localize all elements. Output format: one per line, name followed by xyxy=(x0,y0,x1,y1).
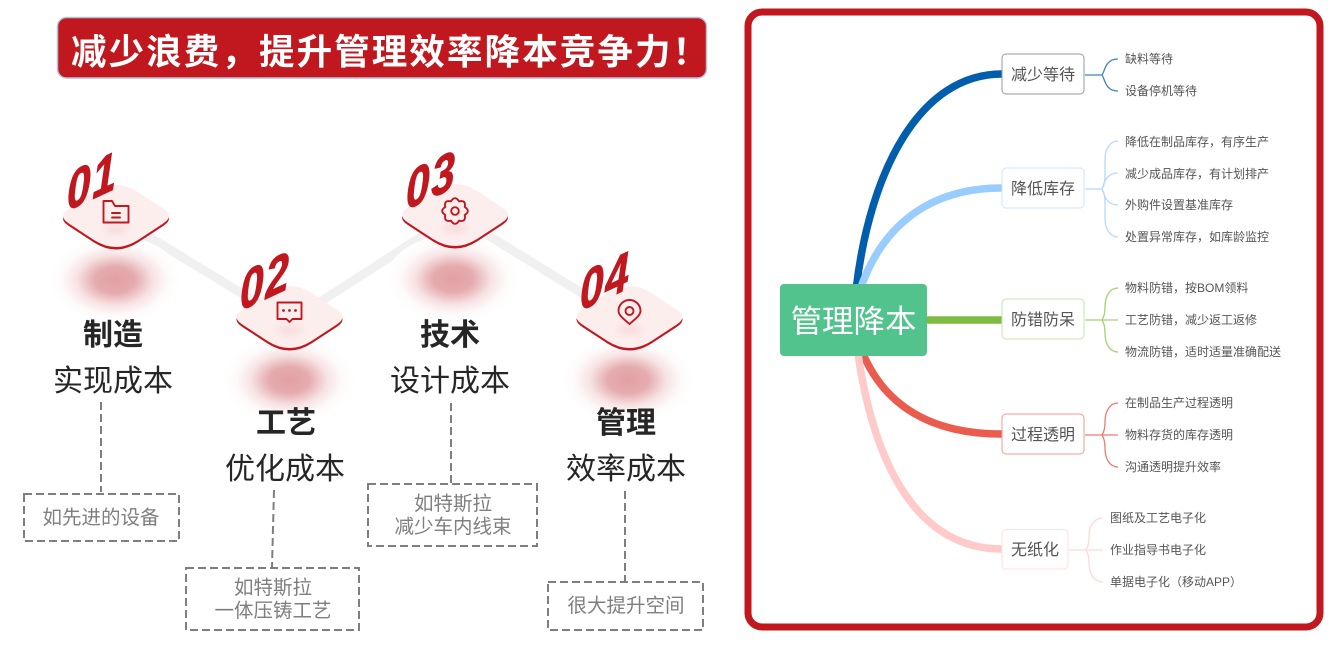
diamond 02 with chat icon xyxy=(236,286,342,350)
node: 过程透明 xyxy=(1002,414,1084,454)
branch curve: 无纸化 xyxy=(858,354,1002,549)
dashed leader 01 xyxy=(100,402,102,492)
heading 工艺: 工艺 xyxy=(256,407,316,440)
branch curve: 降低库存 xyxy=(860,188,1002,290)
node: 降低库存 xyxy=(1002,168,1084,208)
leaves: 过程透明 xyxy=(1125,395,1233,474)
subheading 优化成本: 优化成本 xyxy=(225,453,345,486)
note 01: 如先进的设备 xyxy=(42,507,160,529)
leaves: 无纸化: 作业指导书电子化 xyxy=(1110,542,1206,557)
leaves: 无纸化: 单据电子化（移动APP） xyxy=(1110,575,1242,589)
connector fork: 降低库存 xyxy=(1085,141,1118,237)
dashed leader 03 xyxy=(450,403,452,483)
note 04 xyxy=(548,582,703,630)
note 02: 一体压铸工艺 xyxy=(214,600,332,622)
node: 减少等待: 减少等待 xyxy=(1011,66,1075,84)
note 03: 减少车内线束 xyxy=(394,516,512,538)
node: 无纸化 xyxy=(1002,530,1068,569)
node: 无纸化: 无纸化 xyxy=(1011,541,1059,559)
leaves: 防错防呆: 工艺防错，减少返工返修 xyxy=(1125,312,1257,327)
panel: mind map xyxy=(748,12,1320,627)
leaves: 减少等待: 缺料等待 xyxy=(1125,51,1173,66)
subheading 设计成本: 设计成本 xyxy=(390,365,510,398)
diamond 01 with folder icon xyxy=(63,185,169,250)
number 01: 01 xyxy=(67,138,118,223)
note 02 xyxy=(186,568,359,630)
note 03: 如特斯拉 xyxy=(414,493,492,515)
note 03 xyxy=(368,484,537,546)
leaves: 过程透明: 沟通透明提升效率 xyxy=(1125,459,1221,474)
dashed leader 04 xyxy=(624,491,626,581)
title banner: 减少浪费，提升管理效率降本竞争力！ xyxy=(71,32,710,72)
leaves: 降低库存: 减少成品库存，有计划排产 xyxy=(1125,166,1269,181)
node: 减少等待 xyxy=(1002,54,1084,94)
number 03: 03 xyxy=(406,137,457,222)
shadow blob 04 xyxy=(562,336,694,424)
leaves: 无纸化 xyxy=(1110,511,1242,589)
heading 制造: 制造 xyxy=(83,319,143,352)
leaves: 防错防呆: 物料防错，按BOM领料 xyxy=(1125,280,1248,295)
leaves: 无纸化: 图纸及工艺电子化 xyxy=(1110,511,1206,525)
leaves: 防错防呆 xyxy=(1125,280,1281,359)
note 01 xyxy=(24,494,179,541)
branch line: 防错防呆 xyxy=(925,316,1002,324)
number 04: 04 xyxy=(580,238,631,323)
step 02: process xyxy=(186,238,359,630)
diamond 04 with location pin icon xyxy=(576,286,682,350)
dashed leader 02 xyxy=(272,490,274,567)
heading 技术: 技术 xyxy=(420,319,480,352)
connector fork: 无纸化 xyxy=(1069,518,1103,582)
leaves: 防错防呆: 物流防错，适时适量准确配送 xyxy=(1125,344,1281,359)
connector fork: 过程透明 xyxy=(1085,403,1118,467)
leaves: 降低库存: 处置异常库存，如库龄监控 xyxy=(1125,229,1269,244)
subheading 实现成本: 实现成本 xyxy=(53,365,173,398)
branch curve: 减少等待 xyxy=(856,74,1002,290)
leaves: 降低库存: 降低在制品库存，有序生产 xyxy=(1125,134,1269,149)
node: 降低库存: 降低库存 xyxy=(1011,180,1075,198)
central node: 管理降本 xyxy=(790,303,917,339)
connector fork: 减少等待 xyxy=(1085,59,1118,91)
central node xyxy=(780,284,927,356)
diamond 03 with gear icon xyxy=(402,184,508,248)
number 02: 02 xyxy=(240,238,291,323)
shadow blob 01 xyxy=(49,236,181,324)
leaves: 减少等待: 设备停机等待 xyxy=(1125,83,1197,98)
leaves: 降低库存: 外购件设置基准库存 xyxy=(1125,197,1233,212)
node: 防错防呆 xyxy=(1002,299,1084,339)
subheading 效率成本: 效率成本 xyxy=(566,453,686,486)
connector line xyxy=(116,215,629,322)
node: 防错防呆: 防错防呆 xyxy=(1011,311,1075,329)
title banner xyxy=(58,18,710,78)
heading 管理: 管理 xyxy=(596,407,656,440)
note 04: 很大提升空间 xyxy=(567,595,685,617)
connector fork: 防错防呆 xyxy=(1085,288,1118,352)
shadow blob 02 xyxy=(223,336,355,424)
step 04: management xyxy=(548,238,703,630)
leaves: 减少等待 xyxy=(1125,51,1197,98)
leaves: 降低库存 xyxy=(1125,134,1269,244)
branch curve: 过程透明 xyxy=(863,354,1002,434)
node: 过程透明: 过程透明 xyxy=(1011,426,1075,444)
leaves: 过程透明: 物料存货的库存透明 xyxy=(1125,427,1233,442)
step 01: manufacturing xyxy=(24,138,181,541)
step 03: technology xyxy=(368,137,537,546)
leaves: 过程透明: 在制品生产过程透明 xyxy=(1125,395,1233,410)
note 02: 如特斯拉 xyxy=(234,577,312,599)
shadow blob 03 xyxy=(387,235,519,323)
